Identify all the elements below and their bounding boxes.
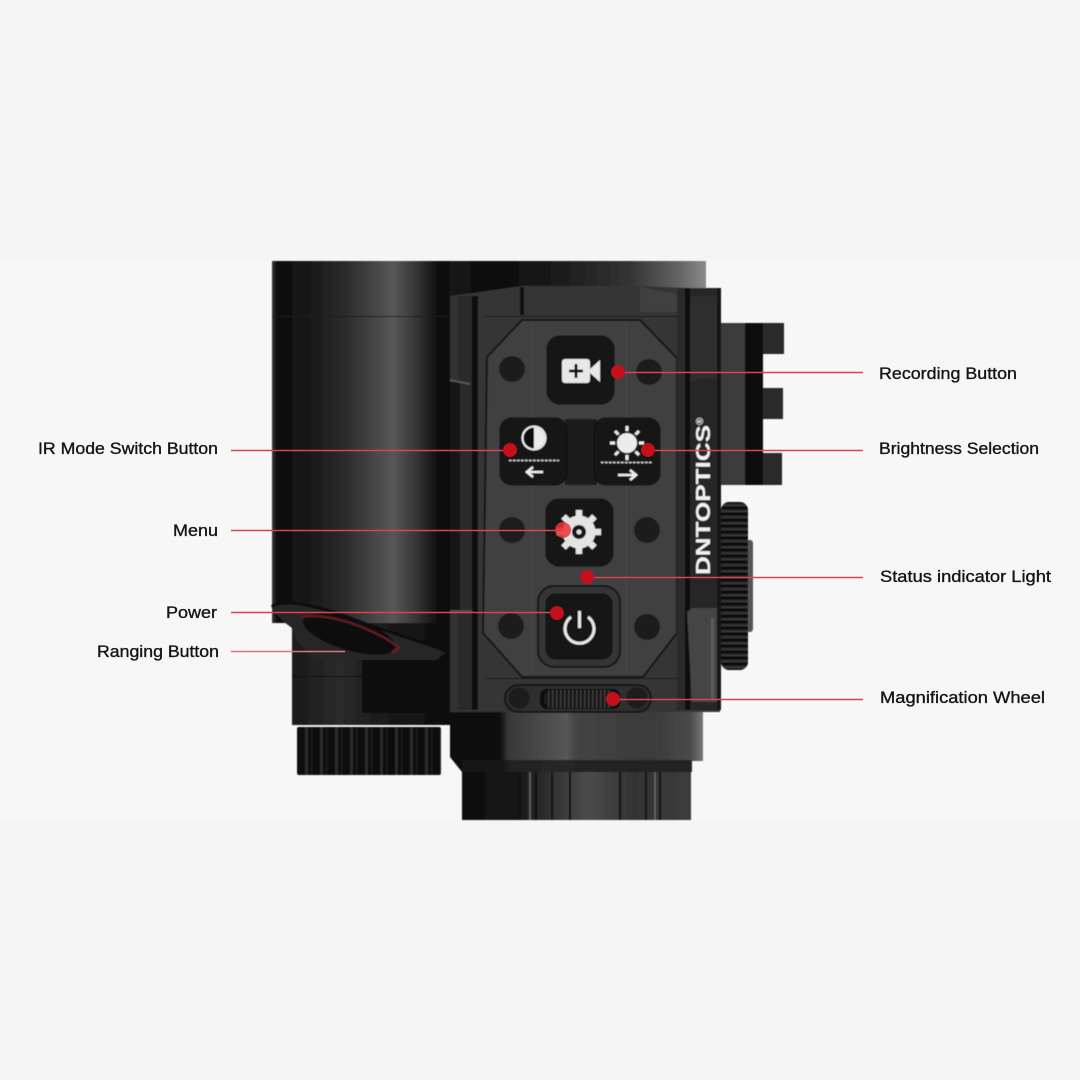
ridged focus knob	[297, 727, 441, 775]
label: IR mode switch button: IR Mode Switch Button	[38, 439, 218, 458]
device: thermal scope illustration	[271, 261, 784, 820]
button: menu gear	[546, 499, 613, 566]
callout: brightness selection	[641, 443, 863, 457]
callout: recording button	[611, 365, 863, 379]
callout: ranging button	[231, 650, 345, 652]
lower housing block	[292, 606, 480, 725]
brand registered mark: ®	[695, 417, 706, 425]
label: ranging button: Ranging Button	[97, 642, 219, 661]
front collar	[450, 710, 703, 772]
magnification wheel bar	[505, 685, 651, 712]
labels	[38, 364, 1051, 707]
callout: menu	[231, 522, 571, 538]
label: brightness selection: Brightness Selection	[879, 439, 1039, 458]
button: brightness	[594, 418, 660, 485]
centre divider between arrow buttons	[565, 419, 597, 485]
callout: status indicator light	[580, 570, 863, 584]
callout: power	[231, 606, 564, 620]
label: recording button: Recording Button	[879, 364, 1017, 383]
callout lines and dots	[231, 365, 863, 706]
label: power: Power	[166, 603, 217, 622]
product photo panel	[0, 260, 1080, 820]
objective lens barrel	[462, 772, 691, 820]
side strap with brand	[677, 288, 721, 710]
label: menu: Menu	[173, 521, 218, 540]
faceplate	[483, 320, 677, 677]
rear housing behind top of body	[450, 261, 706, 311]
brand logo text: DNTOPTICS	[693, 425, 715, 575]
side rail mount	[720, 323, 784, 485]
large cylinder battery tube	[272, 261, 450, 623]
callout: IR mode switch	[231, 443, 517, 457]
callout: magnification wheel	[606, 692, 863, 706]
angled disc with ranging button	[271, 602, 447, 663]
button: recording	[547, 336, 614, 404]
button: power	[538, 586, 620, 667]
ridged side wheel	[721, 502, 753, 670]
main body	[450, 286, 720, 712]
label: magnification wheel: Magnification Wheel	[880, 688, 1045, 707]
button: IR mode switch	[500, 418, 567, 485]
label: status indicator light: Status indicator Light	[880, 567, 1051, 586]
faceplate screws	[498, 356, 662, 640]
